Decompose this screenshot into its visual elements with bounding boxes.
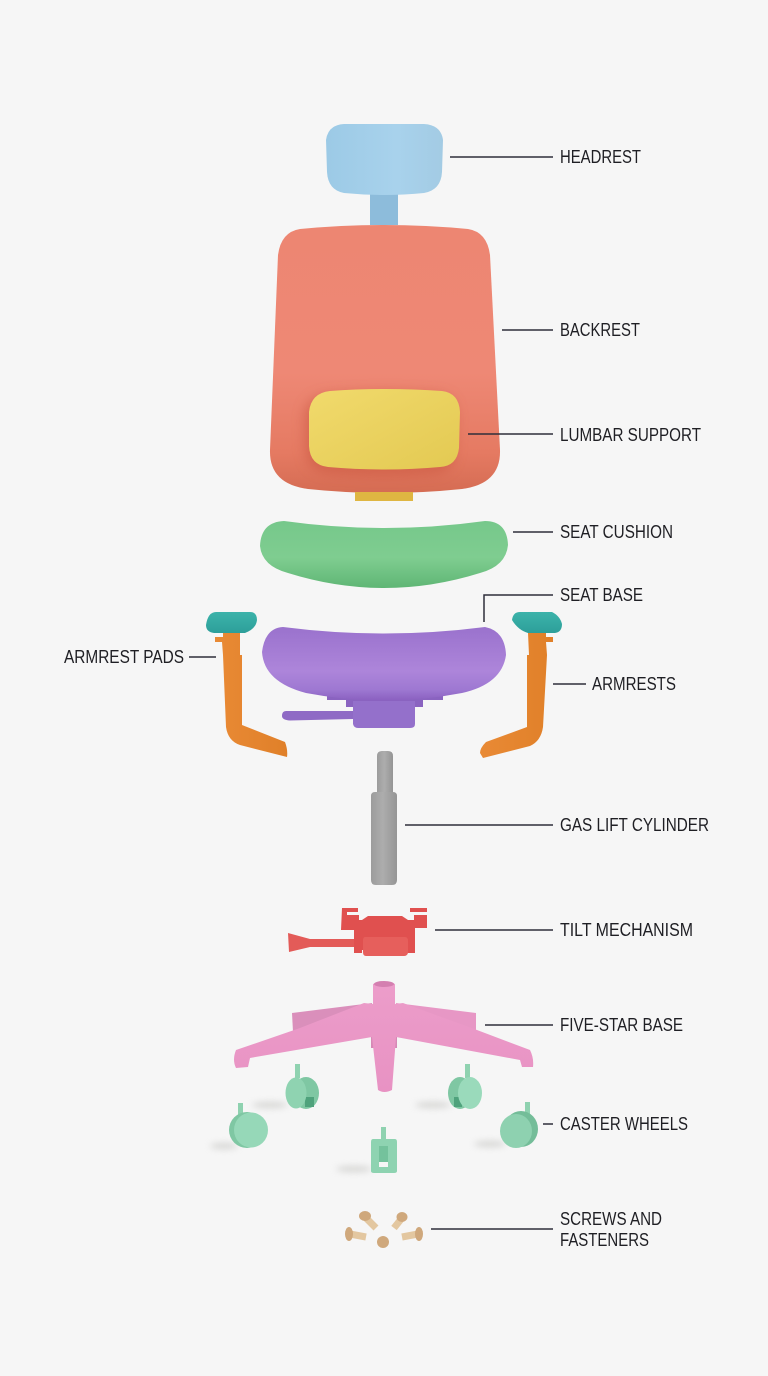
- part: gas lift cylinder: [371, 751, 397, 885]
- part: screws and fasteners: [345, 1211, 423, 1248]
- part: backrest: [270, 225, 500, 493]
- part: lumbar support: [304, 389, 460, 501]
- leader lines: [189, 157, 586, 1229]
- label: tilt mechanism: TILT MECHANISM: [560, 920, 693, 940]
- label: screws and fasteners: FASTENERS: [560, 1230, 649, 1250]
- label: armrest pads: ARMREST PADS: [64, 647, 184, 667]
- part: tilt mechanism: [288, 908, 427, 956]
- label: backrest: BACKREST: [560, 320, 640, 340]
- label: armrests: ARMRESTS: [592, 674, 676, 694]
- label: headrest: HEADREST: [560, 147, 641, 167]
- label: five-star base: FIVE-STAR BASE: [560, 1015, 683, 1035]
- part: armrest left: [206, 612, 287, 757]
- part: seat base: [262, 627, 506, 728]
- part: seat cushion: [260, 521, 508, 588]
- label: seat base: SEAT BASE: [560, 585, 643, 605]
- label: caster wheels: CASTER WHEELS: [560, 1114, 688, 1134]
- part: caster wheels: [210, 1064, 538, 1173]
- label: gas lift cylinder: GAS LIFT CYLINDER: [560, 815, 709, 835]
- label: screws and fasteners: SCREWS AND: [560, 1209, 662, 1229]
- part: headrest: [326, 124, 443, 225]
- part: five-star base: [234, 981, 533, 1092]
- label: seat cushion: SEAT CUSHION: [560, 522, 673, 542]
- label: lumbar support: LUMBAR SUPPORT: [560, 425, 701, 445]
- part: armrest right: [480, 612, 562, 758]
